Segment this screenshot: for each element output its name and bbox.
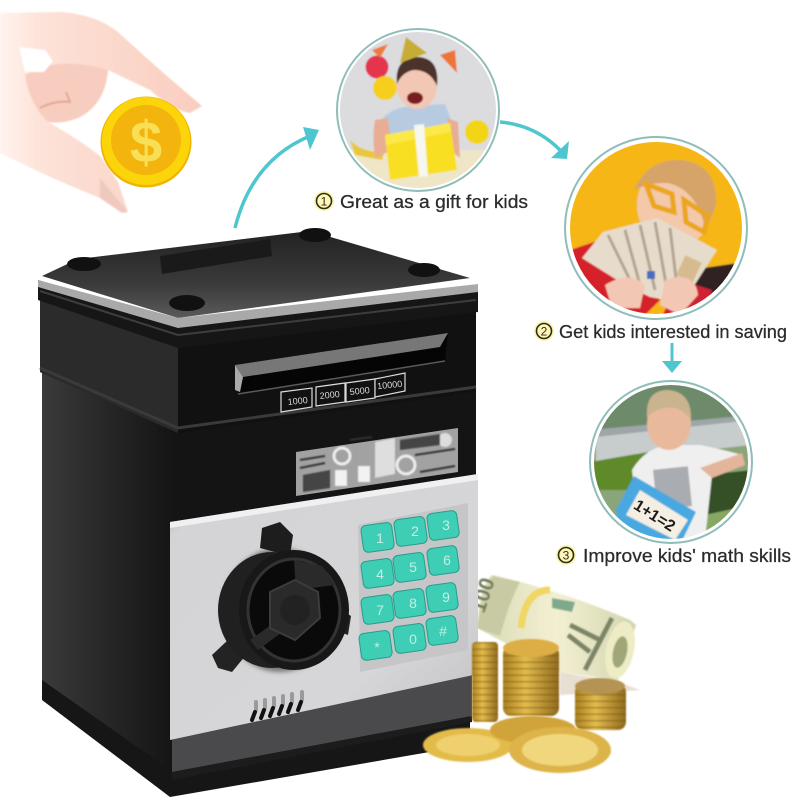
gold dollar coin: [100, 96, 192, 188]
panel: math skills: [556, 381, 791, 566]
number badge 1: 1: [321, 194, 328, 208]
combination dial: [212, 522, 351, 672]
icon: hand holding coin: [0, 12, 202, 213]
denomination labels: [281, 373, 405, 412]
keypad keys: #: [439, 623, 447, 639]
lower front black: [175, 385, 476, 525]
circuit window: [296, 428, 458, 496]
number badge 2: [534, 321, 554, 341]
lid lip: [38, 280, 478, 348]
board equation: 1+1=2: [630, 497, 678, 536]
keypad keys: 3: [442, 517, 450, 533]
keypad recess: [358, 503, 468, 672]
panel: gift for kids: [314, 28, 528, 212]
keypad keys: 1: [376, 530, 384, 546]
denomination labels: 1000: [287, 395, 308, 407]
denomination labels: 2000: [319, 389, 340, 401]
circular photo: child with banknotes: [565, 137, 747, 320]
dark band below panel: [172, 672, 472, 772]
keypad keys: 5: [409, 559, 417, 575]
banknote slot: [235, 333, 448, 394]
coin stack back: [472, 642, 498, 722]
arrow: gift to saving: [500, 122, 569, 159]
lid top surface: [42, 231, 470, 318]
speaker vents: [252, 692, 302, 720]
number badge 3: 3: [563, 548, 570, 562]
flat gold coins: [423, 716, 611, 773]
electronic safe piggy bank: [38, 228, 478, 797]
number badge 3: [556, 545, 576, 565]
base band: [42, 680, 470, 797]
label: great as a gift: Great as a gift for kids: [340, 192, 528, 212]
keypad keys: 4: [376, 566, 384, 582]
circular photo: boy with gift: [335, 28, 505, 198]
keypad keys: 8: [409, 595, 417, 611]
coin slot: [160, 239, 272, 274]
arrow: coin to gift: [235, 127, 319, 228]
label: interested in saving: Get kids interested in saving: [559, 322, 787, 342]
keypad keys: 7: [376, 602, 384, 618]
denomination labels: 10000: [377, 379, 403, 391]
upper section: [40, 300, 476, 433]
keypad keys: 9: [442, 589, 450, 605]
coin stack right: [575, 678, 626, 730]
hand: [0, 12, 202, 213]
panel: interested in saving: [534, 137, 787, 342]
keypad keys: 0: [409, 631, 417, 647]
keypad keys: *: [374, 639, 380, 655]
number badge 1: [314, 191, 334, 211]
number badge 2: 2: [541, 324, 548, 338]
coin stacks and flat coins: [423, 639, 626, 773]
safe left side: [42, 370, 175, 780]
keypad keys: 6: [443, 552, 451, 568]
keypad keys: [358, 510, 460, 661]
denomination labels: 5000: [349, 385, 370, 397]
gold dollar coin: $: [130, 110, 162, 175]
coin stack middle: [503, 639, 559, 716]
arrow: saving to math: [662, 343, 682, 373]
label: math skills: Improve kids' math skills: [583, 546, 791, 566]
rolled banknotes: [467, 575, 640, 695]
rolled banknotes: 100: [467, 575, 500, 616]
circular photo: boy with math board: [590, 381, 752, 545]
lid feet: [67, 228, 440, 311]
silver control panel: [170, 474, 478, 740]
keypad keys: 2: [411, 523, 419, 539]
